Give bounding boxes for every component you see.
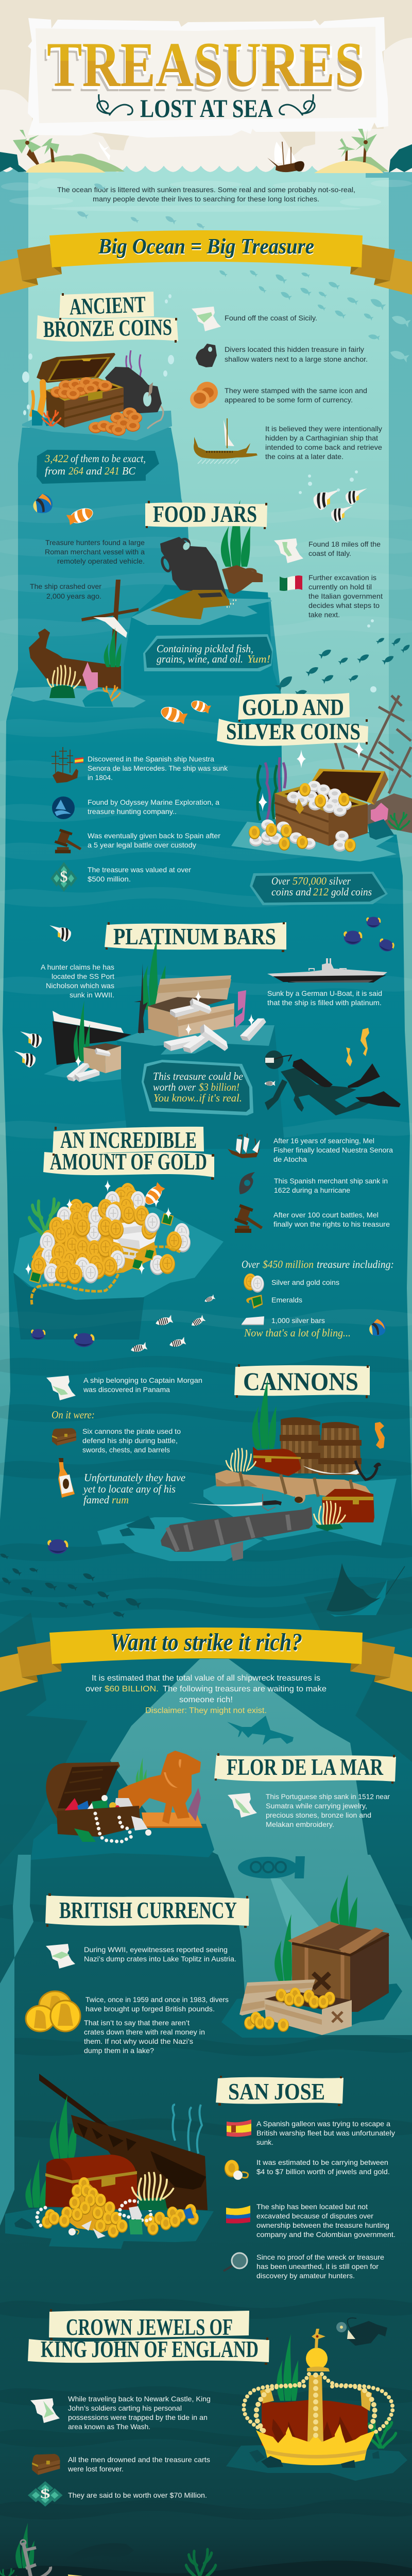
fact: men drowned: were lost forever. <box>67 2465 124 2473</box>
fact: Italy flag: the Italian government <box>308 592 383 600</box>
seabed decorations: anchor, fish and seaweed <box>0 2522 216 2576</box>
fact: Odyssey Marine logo: treasure hunting company.. <box>88 807 177 816</box>
fact: Portuguese ship: precious stones, bronze lion and <box>266 1811 371 1819</box>
seaweed <box>258 757 286 820</box>
fact: Mel Fisher: Fisher finally located Nuestra Senora <box>273 1146 393 1154</box>
callout: 3,422: 241 <box>105 465 119 477</box>
seagull <box>98 141 110 161</box>
fact: Italy flag: decides what steps to <box>308 601 380 609</box>
fact: Colombia dispute: company and the Colombian government. <box>256 2230 396 2239</box>
text: SS Port Nicholson <box>41 963 114 999</box>
crown <box>244 2329 396 2468</box>
callout: 450 million <box>242 1258 394 1270</box>
heading banner: CANNONS <box>243 1367 358 1396</box>
fact: Italy flag <box>280 573 383 619</box>
panel: flor de la mar <box>31 1751 396 1860</box>
fact: stone anchor <box>196 344 368 367</box>
sunken ship with crate of bars <box>44 937 270 1083</box>
manta ray <box>327 1563 405 1617</box>
heading banner <box>28 2309 269 2365</box>
fact: Colombia dispute: The ship has been located but not <box>256 2202 368 2211</box>
callout: 570,000: coins and <box>271 886 311 898</box>
fact: Colombia dispute: ownership between the treasure hunting <box>256 2221 389 2229</box>
fact: Lake Toplitz: During WWII, eyewitnesses reported seeing <box>84 1945 228 1954</box>
text: 2000 years ago: 2,000 years ago. <box>46 592 101 600</box>
fact: six cannons: defend his ship during battle, <box>82 1436 178 1445</box>
fact: the wash <box>30 2395 211 2431</box>
chest with silver coins <box>249 769 412 852</box>
fact: amateur hunters <box>224 2253 384 2280</box>
heading banner <box>217 693 368 746</box>
icon: british coins <box>26 1991 80 2031</box>
fact: Portuguese ship: Sumatra while carrying jewelry, <box>266 1802 367 1810</box>
heading banner: AN INCREDIBLE <box>60 1127 197 1153</box>
text: SS Port Nicholson: located the SS Port <box>52 972 114 980</box>
heading banner: PLATINUM BARS <box>113 924 276 950</box>
hammerhead shark <box>227 1716 294 1745</box>
subheading: on it were: On it were: <box>52 1409 95 1421</box>
fact: Italy flag: currently on hold til <box>308 583 372 591</box>
panel: closing message <box>66 2574 371 2576</box>
fact: the wash: While traveling back to Newark Castle, King <box>68 2395 211 2403</box>
list: silver and gold coins: Silver and gold coins <box>271 1278 339 1286</box>
heading banner: ANCIENT <box>69 291 146 320</box>
fact: jewels and gold: $4 to $7 billion worth of jewels and gold. <box>256 2167 390 2176</box>
clownfish pair <box>159 699 211 725</box>
panel: cannons <box>0 1364 405 1618</box>
heading banner <box>37 291 178 343</box>
submarine with spotlight <box>238 1856 340 1953</box>
fact: Spanish galleon <box>227 2120 395 2146</box>
banner: Want to strike it rich? <box>0 1628 412 1692</box>
seaweed <box>221 500 250 567</box>
fact: Mel Fisher: After 16 years of searching, Mel <box>273 1137 374 1145</box>
text: 60 billion estimate: It is estimated that the total value of all shipwreck treasures is <box>92 1674 320 1683</box>
heading banner: BRITISH CURRENCY <box>59 1897 237 1923</box>
intro text: many people devote their lives to searching for these long lost riches. <box>93 195 319 203</box>
panel: san jose <box>5 2074 396 2280</box>
callout: rum: famed <box>83 1494 109 1506</box>
fact: Mel Fisher: de Atocha <box>273 1155 307 1163</box>
banner: Want to strike it rich?: Want to strike it rich? <box>111 1630 303 1657</box>
fact: Spanish galleon: British warship fleet but was unfortunately <box>256 2129 395 2137</box>
list: emeralds <box>246 1295 302 1309</box>
callout: 570,000: 570,000 <box>293 875 327 887</box>
fact: Carthaginian ship: intended to come back and retrieve <box>265 443 382 451</box>
fact: six cannons <box>52 1427 181 1454</box>
sailing ship <box>267 142 304 172</box>
fish school: dark <box>275 636 411 696</box>
fact: amateur hunters: discovery by amateur hunters. <box>256 2272 355 2280</box>
fact: 70 million: They are said to be worth over $70 Million. <box>68 2491 207 2499</box>
callout: 3 billion <box>142 1060 253 1115</box>
fact: legal battle: a 5 year legal battle over custody <box>88 841 196 849</box>
shipwreck <box>10 580 146 707</box>
callout: 3,422: 3,422 <box>44 452 68 465</box>
rock platform <box>226 2445 407 2481</box>
callout: pickled fish: grains, wine, and oil. <box>157 653 243 665</box>
fact: jewels and gold: It was estimated to be carrying between <box>256 2158 388 2166</box>
fact: Carthaginian ship <box>194 418 382 464</box>
fact: value <box>50 862 191 892</box>
fact: value: $500 million. <box>88 875 131 883</box>
fact: Portuguese ship: Melakan embroidery. <box>266 1820 334 1828</box>
callout: rum: rum <box>112 1494 129 1506</box>
fact: amateur hunters: Since no proof of the wreck or treasure <box>256 2253 384 2261</box>
fact: forged pounds: Twice, once in 1959 and once in 1983, divers <box>85 1995 229 2004</box>
text: roman vessel <box>45 538 145 565</box>
callout: pickled fish <box>143 634 273 671</box>
callout: 3,422 <box>37 450 159 484</box>
callout: rum: yet to locate any of his <box>82 1483 176 1495</box>
fact: Portuguese ship: This Portuguese ship sank in 1512 near <box>266 1792 390 1801</box>
heading banner: AMOUNT OF GOLD <box>50 1149 207 1175</box>
list: silver bars: 1,000 silver bars <box>271 1316 325 1325</box>
panel: ancient bronze coins <box>22 291 382 484</box>
fact: Italy flag: Further excavation is <box>308 573 376 582</box>
text: 60 billion estimate: someone rich! <box>179 1696 233 1704</box>
heading banner: FOOD JARS <box>153 501 257 527</box>
banner: Big Ocean = Big Treasure <box>0 230 412 295</box>
fact: Spanish ship: in 1804. <box>88 773 113 782</box>
callout: 450 million: treasure including: <box>317 1258 394 1270</box>
text: roman vessel: remotely operated vehicle. <box>57 557 145 565</box>
fact: Spanish ship: Discovered in the Spanish ship Nuestra <box>88 755 214 763</box>
callout: 3 billion: $3 billion! <box>199 1081 239 1093</box>
callout: 3,422: BC <box>122 465 136 477</box>
callout: 570,000: Over <box>271 875 290 887</box>
rock ledge <box>131 598 272 625</box>
fact: stamped coins: They were stamped with the same icon and <box>225 386 367 395</box>
fact: legal battle: Was eventually given back to Spain after <box>88 832 220 840</box>
fact: Italy flag: take next. <box>308 611 340 619</box>
gold pile illustration <box>25 1180 191 1304</box>
text: German U-Boat <box>267 989 382 1007</box>
callout: 3,422: and <box>86 465 102 477</box>
text: German U-Boat: that the ship is filled with platinum. <box>267 998 382 1007</box>
text: 60 billion estimate: over <box>85 1685 102 1693</box>
parchment sign <box>28 17 388 138</box>
panel: gold and silver coins <box>46 693 412 905</box>
list: silver and gold coins <box>244 1274 339 1293</box>
heading banner <box>45 1893 249 1928</box>
text: 60 billion estimate: The following treasures are waiting to make <box>163 1685 327 1693</box>
fact: Captain Morgan <box>46 1376 202 1400</box>
platform rock <box>13 1207 224 1300</box>
fact: Sicily <box>192 307 317 331</box>
fact: Spanish ship: Senora de las Mercedes. The ship was sunk <box>88 764 228 772</box>
callout: 450 million: $450 million <box>263 1258 314 1270</box>
shipwreck masts <box>335 696 411 793</box>
reef fish <box>14 917 396 1086</box>
callout: 570,000: silver <box>329 875 351 887</box>
amphorae <box>150 537 263 619</box>
fact: hurricane: This Spanish merchant ship sank in <box>274 1177 388 1185</box>
shipwreck, chest and jewels <box>14 2074 208 2239</box>
fact: court battles <box>234 1204 390 1233</box>
lion statue <box>117 1751 202 1828</box>
callout: pickled fish: Yum! <box>247 653 270 665</box>
rock shadow <box>13 1273 144 1340</box>
heading banner: BRONZE COINS <box>43 314 172 342</box>
callout: 3,422: 264 <box>68 465 83 477</box>
callout: 570,000 <box>250 872 388 905</box>
fact: jewels and gold <box>225 2158 390 2180</box>
fish silhouettes <box>76 182 205 229</box>
fact: 70 million <box>28 2481 207 2506</box>
fact: forged pounds: dump them in a lake? <box>84 2046 154 2055</box>
text: SS Port Nicholson: Nicholson which was <box>46 981 114 990</box>
illustration: chest and anchor on rock <box>22 294 174 440</box>
list: emeralds: Emeralds <box>271 1296 302 1304</box>
intro text: The ocean floor is littered with sunken treasures. Some real and some probably not-so-real, <box>57 185 355 194</box>
fact: hurricane: 1622 during a hurricane <box>274 1186 350 1194</box>
fact: Captain Morgan: was discovered in Panama <box>83 1385 170 1394</box>
rock ledge <box>117 1025 274 1055</box>
banner: Big Ocean = Big Treasure: Big Ocean = Big Treasure <box>98 236 315 260</box>
text: German U-Boat: Sunk by a German U-Boat, it is said <box>267 989 382 997</box>
fact: Odyssey Marine logo: Found by Odyssey Marine Exploration, a <box>88 798 219 806</box>
callout: pickled fish: Containing pickled fish, <box>157 642 253 655</box>
text: 2000 years ago <box>30 582 101 600</box>
cannon and barrels illustration <box>97 1379 397 1561</box>
fact: Spanish galleon: A Spanish galleon was trying to escape a <box>256 2120 390 2128</box>
right island with palm trees <box>314 129 389 173</box>
sparkles <box>258 740 364 825</box>
fact: stone anchor: shallow waters next to a large stone anchor. <box>225 355 368 363</box>
fact: value: The treasure was valued at over <box>88 866 191 874</box>
fact: stamped coins <box>190 382 367 409</box>
fact: the wash: area known as The Wash. <box>68 2422 150 2431</box>
rock column <box>117 1025 285 1149</box>
heading banner: GOLD AND <box>242 694 344 720</box>
fact: forged pounds: have brought up forged British pounds. <box>85 2005 215 2013</box>
small fish and seahorse <box>47 1422 385 1554</box>
fact: Portuguese ship <box>228 1792 390 1828</box>
heading banner <box>43 1127 214 1180</box>
rock ledge <box>231 822 397 861</box>
list: silver bars <box>242 1316 325 1325</box>
heading banner: SAN JOSE <box>228 2079 325 2105</box>
fish school <box>0 1552 142 1618</box>
fact: forged pounds <box>84 1995 229 2055</box>
callout: 450 million: Over <box>242 1258 260 1270</box>
panel: crown jewels of king john <box>28 2309 407 2506</box>
banner: Big Ocean = Big Treasure: Big Ocean = Big Treasure <box>98 235 314 259</box>
banner: Want to strike it rich?: Want to strike it rich? <box>110 1629 302 1656</box>
heading banner: CROWN JEWELS OF <box>66 2314 233 2340</box>
flourishes <box>97 94 315 115</box>
text: roman vessel: Treasure hunters found a large <box>45 538 145 547</box>
text: SS Port Nicholson: A hunter claims he has <box>41 963 114 971</box>
fish group <box>31 1294 387 1354</box>
fact: Colombia dispute <box>226 2202 396 2239</box>
fact: Italy map: Found 18 miles off the <box>308 540 381 548</box>
fact: amateur hunters: has been unearthed, it is still open for <box>256 2262 379 2270</box>
fact: stamped coins: appeared to be some form of currency. <box>225 396 353 404</box>
fact: Italy map: coast of Italy. <box>308 549 351 557</box>
callout: bling: Now that's a lot of bling... <box>244 1327 351 1339</box>
tropical fish group <box>32 470 376 692</box>
treasure chest with jewels <box>46 1762 151 1842</box>
text: 60 billion estimate: Disclaimer: They might not exist. <box>145 1706 267 1715</box>
fact: hurricane <box>239 1172 388 1194</box>
rock platform <box>5 2207 214 2249</box>
fact: Sicily: Found off the coast of Sicily. <box>225 314 317 322</box>
panel: food jars <box>10 500 383 707</box>
callout: 3 billion: This treasure could be <box>153 1070 243 1082</box>
panel: british currency <box>26 1856 402 2055</box>
rock with jars platform <box>124 585 281 696</box>
fact: forged pounds: crates down there with real money in <box>84 2028 205 2036</box>
fact: court battles: After over 100 court battles, Mel <box>273 1211 379 1219</box>
fact: Carthaginian ship: the coins at a later date. <box>265 452 344 461</box>
fact: court battles: finally won the rights to his treasure <box>273 1220 390 1228</box>
fish school: light <box>218 269 386 341</box>
fact: Carthaginian ship: hidden by a Carthaginian ship that <box>265 434 378 442</box>
callout: 3,422: from <box>45 465 65 477</box>
scuba diver <box>265 1050 401 1115</box>
fact: men drowned <box>32 2454 210 2475</box>
fact: Italy map <box>274 538 381 563</box>
callout: rum: Unfortunately they have <box>84 1471 185 1484</box>
heading banner: KING JOHN OF ENGLAND <box>41 2336 259 2362</box>
panel: an incredible amount of gold <box>13 1127 394 1354</box>
rum bottle <box>58 1458 75 1498</box>
callout: rum <box>82 1471 185 1506</box>
callout: 3 billion: You know..if it's real. <box>153 1092 242 1104</box>
fact: Carthaginian ship: It is believed they were intentionally <box>265 425 382 433</box>
left island with palm trees <box>13 130 125 173</box>
fact: Lake Toplitz: Nazi’s dump crates into Lake Toplitz in Austria. <box>84 1955 236 1963</box>
submarine <box>267 958 387 982</box>
intro text <box>57 185 355 203</box>
panel: platinum bars <box>14 917 401 1149</box>
text: SS Port Nicholson: sunk in WWII. <box>70 991 114 999</box>
callout: 570,000: 212 <box>313 886 329 898</box>
text: roman vessel: Roman merchant vessel with a <box>45 548 145 556</box>
fact: Spanish ship <box>46 747 228 783</box>
fact: Colombia dispute: excavated because of disputes over <box>256 2212 373 2220</box>
fact: forged pounds: them. If not why would the Nazi’s <box>84 2037 193 2045</box>
crates illustration <box>221 1874 402 2038</box>
subtitle: LOST AT SEA: LOST AT SEA <box>140 94 273 123</box>
anglerfish <box>336 2318 387 2346</box>
callout: 570,000: gold coins <box>331 886 372 898</box>
text: 2000 years ago: The ship crashed over <box>30 582 101 590</box>
fact: the wash: John’s soldiers carting his personal <box>68 2404 182 2412</box>
fact: Spanish galleon: sunk. <box>256 2138 273 2146</box>
callout: 3 billion: worth over <box>153 1081 196 1093</box>
text: 60 billion estimate <box>85 1674 327 1715</box>
fact: Mel Fisher <box>228 1133 393 1163</box>
callout: 3,422: of them to be exact, <box>71 452 146 465</box>
seahorses <box>346 1028 369 1066</box>
fact: Lake Toplitz <box>46 1944 236 1969</box>
fact: six cannons: swords, chests, and barrels <box>82 1446 170 1454</box>
heading banner: SILVER COINS <box>226 719 360 744</box>
fact: Captain Morgan: A ship belonging to Captain Morgan <box>83 1376 202 1384</box>
fact: legal battle <box>55 829 220 853</box>
fact: the wash: possessions were trapped by the tide in an <box>68 2413 208 2421</box>
fact: stone anchor: Divers located this hidden treasure in fairly <box>225 345 364 353</box>
clownfish <box>142 1182 166 1207</box>
fact: Odyssey Marine logo <box>52 796 219 819</box>
panel: title header <box>13 17 389 229</box>
fact: men drowned: All the men drowned and the treasure carts <box>68 2455 210 2464</box>
rock <box>31 1824 214 1860</box>
fact: forged pounds: That isn’t to say that there aren’t <box>84 2019 190 2027</box>
text: 60 billion estimate: $60 BILLION. <box>105 1685 159 1693</box>
fact: six cannons: Six cannons the pirate used to <box>82 1427 181 1435</box>
